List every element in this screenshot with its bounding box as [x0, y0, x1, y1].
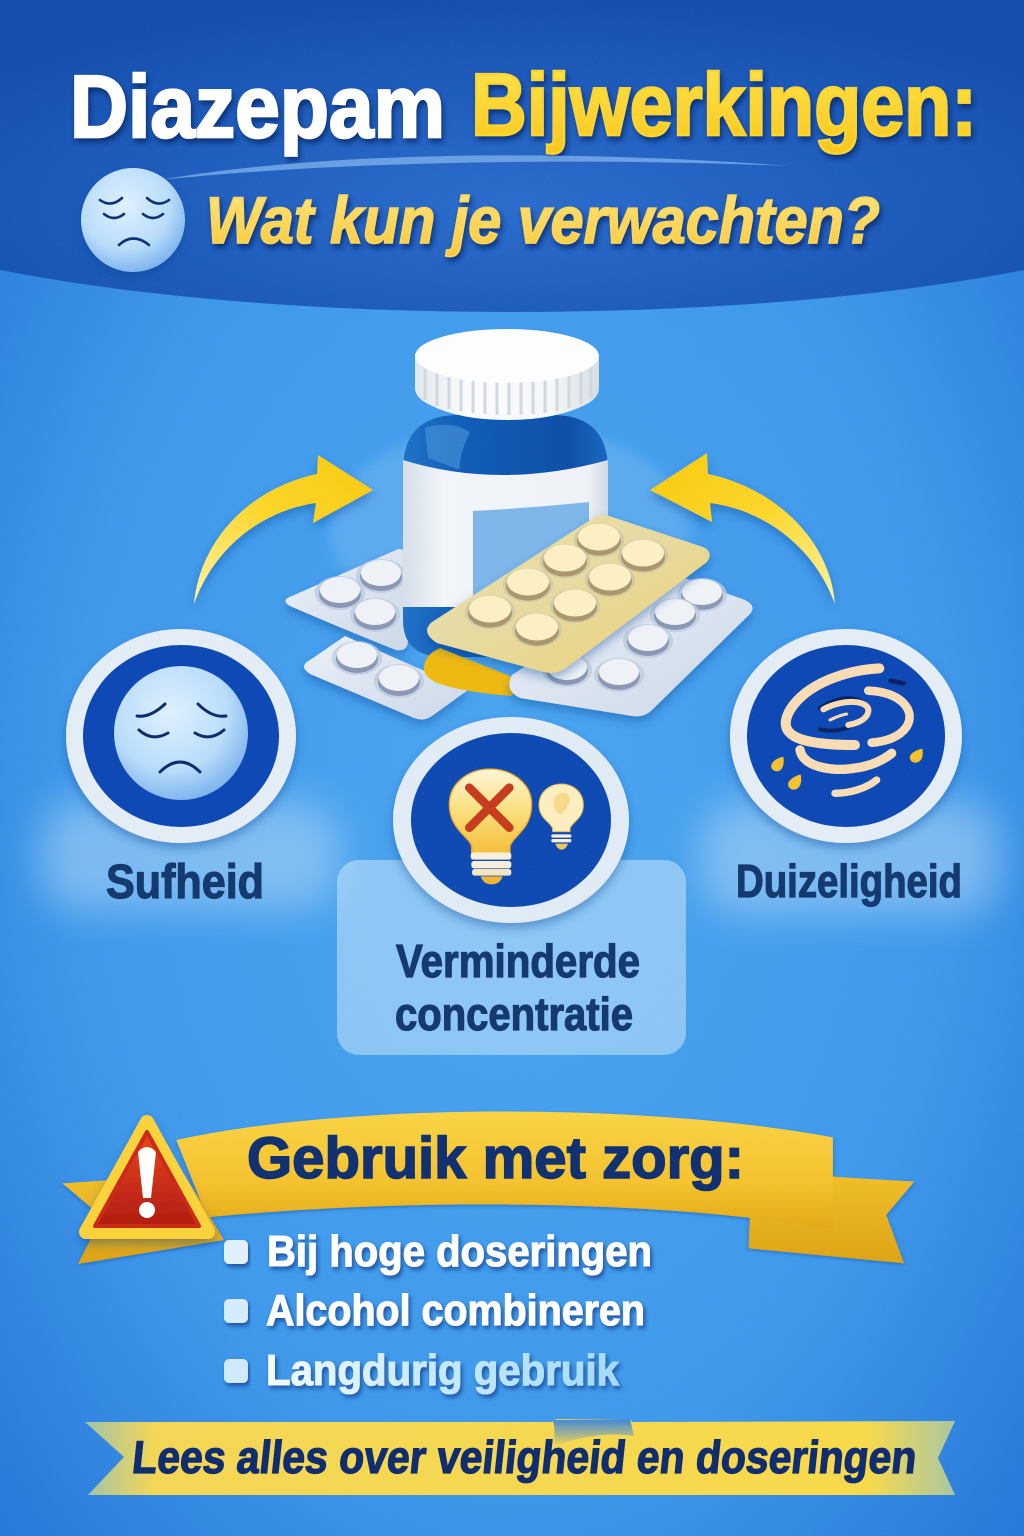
- blister: right: [509, 572, 753, 716]
- cap top: [415, 329, 599, 383]
- list item: hoge doseringen: Bij hoge doseringen: [267, 1227, 652, 1276]
- caution list: [224, 1227, 652, 1395]
- bulbs: [449, 769, 583, 884]
- label: Verminderde concentratie: Verminderde: [396, 935, 640, 987]
- ribbon: [62, 1112, 914, 1264]
- blister: yellow front: [427, 515, 710, 673]
- label: Verminderde concentratie: [395, 935, 640, 1040]
- yellow flap: [424, 648, 520, 696]
- icon: Sufheid circle: [66, 629, 296, 843]
- circle ring: [393, 717, 629, 923]
- circle ring: [66, 629, 296, 843]
- arrow: left yellow: [194, 455, 373, 604]
- list item: alcohol: Alcohol combineren: [266, 1286, 645, 1335]
- ribbon main: [176, 1112, 833, 1229]
- label: Sufheid: Sufheid: [106, 856, 264, 909]
- circle inner: [747, 645, 945, 827]
- bottle blue label patch: [473, 502, 589, 598]
- soft halo behind bottle: [330, 425, 690, 635]
- list item: langdurig: Langdurig gebruik: [266, 1346, 619, 1395]
- glow panel: Sufheid: [40, 800, 340, 910]
- ribbon tail: right: [749, 1172, 914, 1263]
- icon: header sad face: [81, 168, 185, 272]
- triangle border: [86, 1122, 208, 1232]
- bottle highlight: [425, 425, 470, 470]
- bottle cap: [415, 356, 599, 420]
- cap ribs: [425, 361, 591, 415]
- icon: concentration circle: [393, 717, 629, 923]
- circle inner: [83, 645, 279, 827]
- icon: Duizeligheid circle: [730, 629, 962, 843]
- circle inner: [411, 733, 611, 907]
- icon: warning triangle: [86, 1122, 208, 1232]
- swoosh under title: [160, 155, 790, 180]
- bottom banner: [85, 1419, 955, 1495]
- banner notch: [553, 1419, 634, 1446]
- bottle: [403, 329, 608, 657]
- title: Diazepam: Diazepam: [70, 57, 445, 156]
- face features: [137, 704, 226, 772]
- label: Duizeligheid: Duizeligheid: [736, 855, 962, 907]
- arrow: right yellow: [650, 453, 835, 604]
- triangle fill: [95, 1132, 199, 1226]
- exclamation bar: [138, 1147, 156, 1198]
- spiral: [771, 668, 923, 793]
- bottle body: [403, 415, 608, 657]
- exclamation dot: [139, 1202, 155, 1218]
- blister: back left: [285, 549, 408, 650]
- label: Verminderde concentratie: concentratie: [395, 988, 633, 1040]
- blister: lower left: [304, 636, 468, 720]
- ribbon tail: left: [62, 1175, 224, 1264]
- drops: [771, 749, 923, 790]
- title: [70, 55, 977, 156]
- panel: Verminderde concentratie: [337, 860, 686, 1055]
- circle ring: [730, 629, 962, 843]
- header band: [0, 0, 1024, 312]
- subtitle: Wat kun je verwachten?: [206, 183, 880, 257]
- glow panel: Duizeligheid: [700, 800, 1000, 915]
- bottle label: [403, 460, 608, 607]
- face: [114, 666, 248, 800]
- ribbon heading: Gebruik met zorg:: [247, 1126, 744, 1191]
- banner text: Lees alles over veiligheid en doseringen: [130, 1431, 919, 1483]
